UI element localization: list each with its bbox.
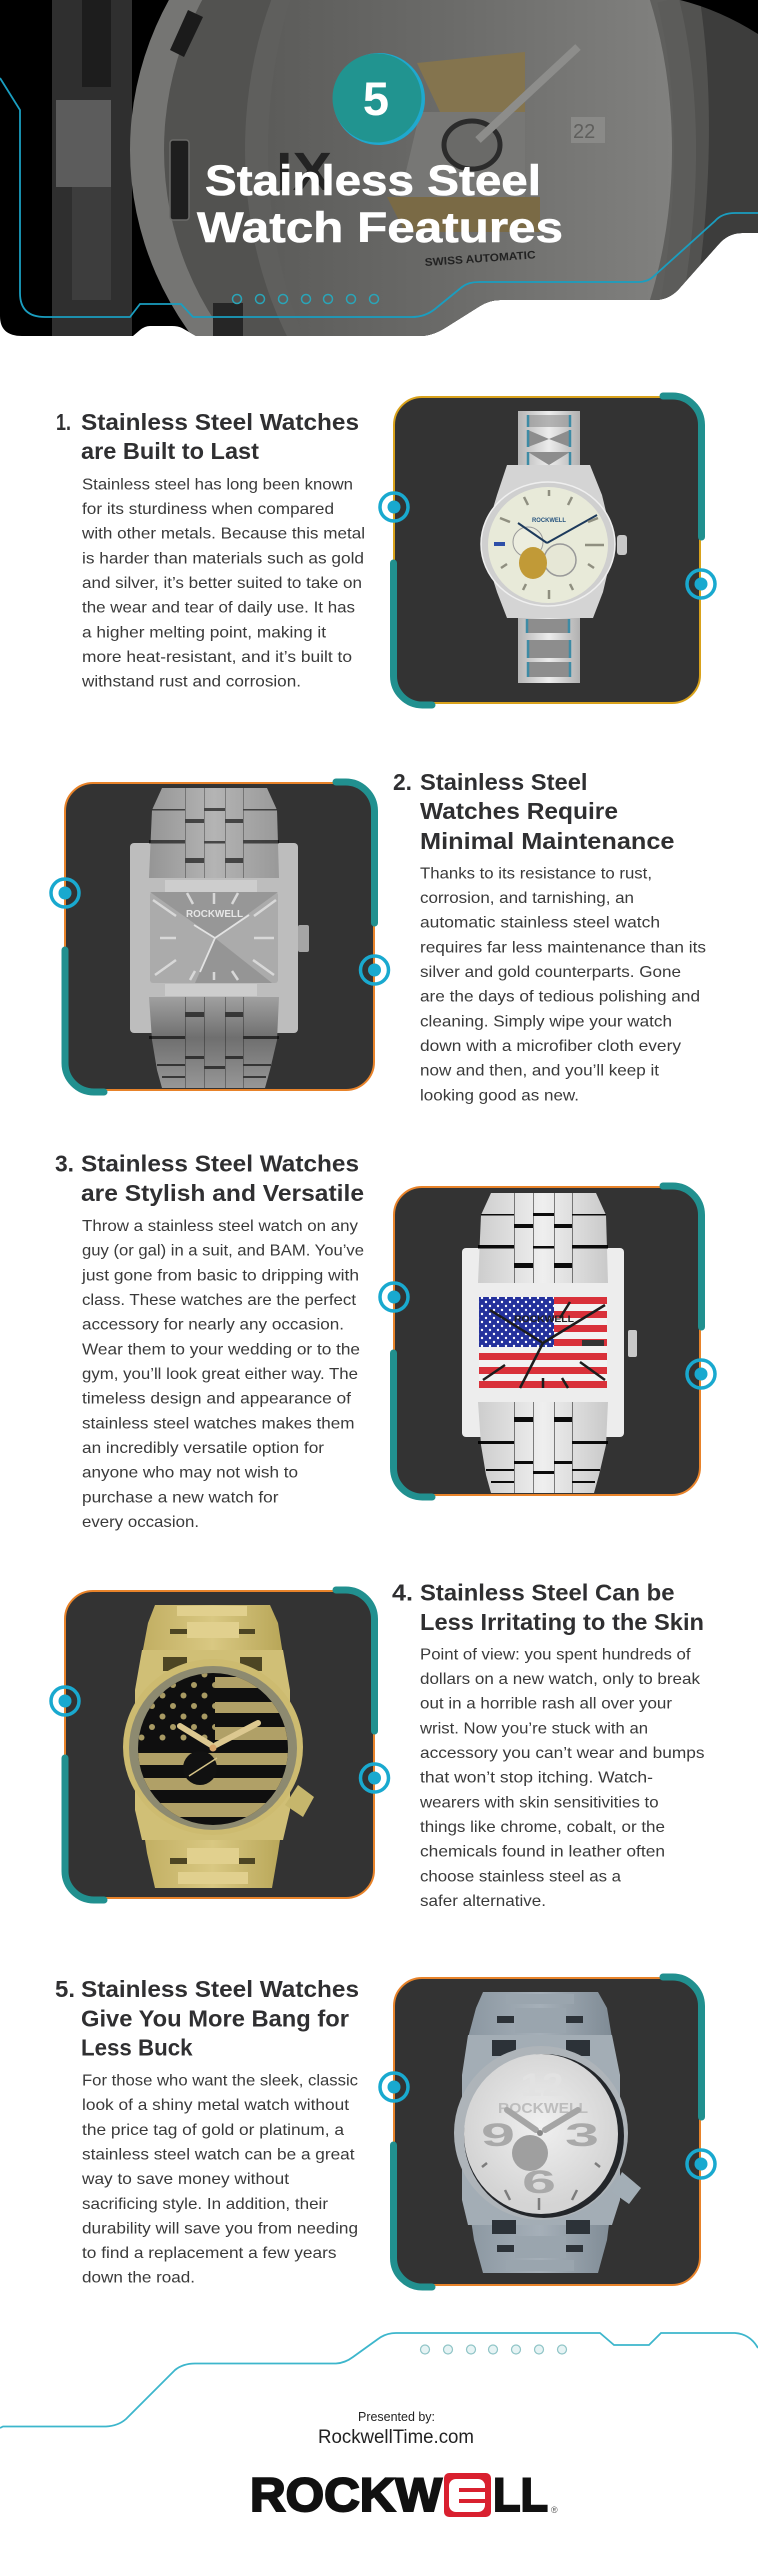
- body text 1: more heat-resistant, and it’s built to: [82, 649, 352, 666]
- icon: silver skeleton watch: ROCKWELL: [532, 518, 566, 524]
- body text 4: choose stainless steel as a: [420, 1868, 621, 1885]
- heading 4: 4.: [392, 1580, 413, 1606]
- logo: Rockwell: ROCKW: [250, 2468, 443, 2521]
- heading 2: Minimal Maintenance: [420, 828, 674, 854]
- body text 2: requires far less maintenance than its: [420, 939, 706, 956]
- body text 4: out in a horrible rash all over your: [420, 1696, 673, 1713]
- body text 2: [420, 865, 706, 1104]
- heading 5: Give You More Bang for: [81, 2006, 349, 2032]
- panel: watch 4: [51, 1590, 388, 1900]
- header background: watch close-up: [0, 0, 758, 336]
- body text 3: anyone who may not wish to: [82, 1465, 298, 1482]
- body text 3: gym, you’ll look great either way. The: [82, 1366, 358, 1383]
- icon: gold flag watch: [123, 1605, 314, 1888]
- heading 2: [393, 769, 674, 854]
- body text 5: stainless steel watch can be a great: [82, 2146, 355, 2164]
- body text 3: guy (or gal) in a suit, and BAM. You’ve: [82, 1243, 364, 1260]
- icon: steel-blue watch: 6: [522, 2164, 556, 2200]
- marker left: [380, 493, 408, 521]
- heading 3: are Stylish and Versatile: [81, 1180, 364, 1206]
- body text 2: silver and gold counterparts. Gone: [420, 964, 681, 981]
- icon: steel-blue watch: 12: [520, 2067, 564, 2103]
- icon: steel-blue watch: 3: [565, 2117, 599, 2153]
- header background: watch close-up: 22: [573, 121, 595, 143]
- body text 1: the wear and tear of daily use. It has: [82, 600, 355, 617]
- marker right: [360, 956, 388, 984]
- decorative dots row: [232, 294, 378, 304]
- body text 5: down the road.: [82, 2270, 195, 2287]
- heading 1: [56, 409, 359, 464]
- logo: Rockwell: LL: [493, 2468, 548, 2521]
- heading 1: are Built to Last: [81, 438, 259, 464]
- body text 3: accessory for nearly any occasion.: [82, 1317, 344, 1334]
- marker left: [380, 1283, 408, 1311]
- heading 5: [55, 1976, 359, 2061]
- body text 3: class. These watches are the perfect: [82, 1292, 357, 1309]
- body text 3: [81, 1218, 364, 1531]
- presented by: Presented by:: [358, 2410, 435, 2424]
- section 4: [51, 1580, 704, 1910]
- header banner: [0, 0, 758, 336]
- body text 1: with other metals. Because this metal: [81, 526, 365, 543]
- header background: watch close-up: IX: [276, 142, 332, 202]
- body text 1: a higher melting point, making it: [82, 624, 327, 641]
- icon: American flag watch: [462, 1193, 637, 1493]
- decorative dots row: [420, 2345, 566, 2354]
- body text 2: down with a microfiber cloth every: [420, 1038, 681, 1055]
- icon: American flag watch: ROCKWELL: [514, 1314, 575, 1324]
- body text 3: stainless steel watches makes them: [82, 1415, 354, 1432]
- icon: steel-blue watch: 9: [481, 2117, 515, 2153]
- logo: Rockwell: ®: [551, 2505, 558, 2515]
- footer: [0, 2333, 758, 2521]
- body text 3: purchase a new watch for: [82, 1489, 279, 1506]
- heading 5: 5.: [55, 1976, 75, 2002]
- heading 3: Stainless Steel Watches: [81, 1151, 359, 1177]
- heading 3: 3.: [55, 1151, 74, 1177]
- body text 2: automatic stainless steel watch: [420, 915, 660, 932]
- section 5: [55, 1976, 715, 2287]
- presented by: [318, 2410, 474, 2448]
- icon: silver rectangular watch: [130, 788, 309, 1088]
- body text 4: things like chrome, cobalt, or the: [420, 1819, 665, 1836]
- body text 2: Thanks to its resistance to rust,: [420, 865, 652, 882]
- marker left: [51, 1687, 79, 1715]
- header background: watch close-up: SWISS AUTOMATIC: [424, 249, 536, 269]
- number badge: 5: [363, 72, 389, 125]
- logo: Rockwell: [250, 2468, 558, 2521]
- body text 1: [81, 476, 365, 691]
- body text 2: corrosion, and tarnishing, an: [420, 890, 634, 907]
- body text 1: withstand rust and corrosion.: [81, 674, 301, 691]
- body text 3: just gone from basic to dripping with: [81, 1267, 359, 1284]
- heading 4: Less Irritating to the Skin: [420, 1609, 704, 1635]
- heading 2: Stainless Steel: [420, 769, 588, 795]
- heading 2: 2.: [393, 769, 412, 795]
- body text 4: [419, 1646, 704, 1910]
- panel: watch 5: [380, 1977, 715, 2287]
- body text 2: now and then, and you’ll keep it: [420, 1063, 660, 1080]
- body text 2: looking good as new.: [420, 1087, 579, 1104]
- title: Stainless Steel: [205, 157, 541, 205]
- body text 2: cleaning. Simply wipe your watch: [420, 1013, 672, 1030]
- body text 1: for its sturdiness when compared: [82, 501, 334, 518]
- icon: steel-blue watch: ROCKWELL: [498, 2100, 588, 2117]
- cyan circuit line: [0, 2333, 758, 2428]
- body text 3: every occasion.: [82, 1514, 199, 1531]
- body text 5: For those who want the sleek, classic: [82, 2072, 358, 2090]
- body text 4: wrist. Now you’re stuck with an: [419, 1720, 648, 1737]
- body text 5: the price tag of gold or platinum, a: [82, 2122, 344, 2139]
- heading 5: Less Buck: [81, 2035, 193, 2061]
- body text 5: look of a shiny metal watch without: [82, 2097, 350, 2114]
- body text 1: Stainless steel has long been known: [82, 476, 353, 493]
- marker right: [687, 2150, 715, 2178]
- body text 3: an incredibly versatile option for: [82, 1440, 325, 1457]
- body text 3: Wear them to your wedding or to the: [82, 1341, 360, 1358]
- heading 1: 1.: [56, 409, 71, 435]
- body text 4: that won’t stop itching. Watch-: [420, 1770, 653, 1787]
- section 3: [55, 1151, 715, 1531]
- body text 4: Point of view: you spent hundreds of: [420, 1646, 691, 1663]
- icon: silver skeleton watch: [481, 411, 627, 683]
- body text 1: is harder than materials such as gold: [82, 550, 364, 567]
- cyan circuit line: [0, 78, 758, 317]
- heading 3: [55, 1151, 364, 1206]
- number badge: [332, 53, 425, 145]
- heading 4: [392, 1580, 704, 1635]
- title: [197, 157, 563, 252]
- heading 1: Stainless Steel Watches: [81, 409, 359, 435]
- section 2: [51, 769, 706, 1104]
- body text 1: and silver, it’s better suited to take on: [82, 575, 362, 592]
- body text 2: are the days of tedious polishing and: [420, 989, 700, 1006]
- body text 4: chemicals found in leather often: [420, 1844, 665, 1861]
- panel: watch 2: [51, 782, 388, 1092]
- section 1: [56, 396, 715, 705]
- icon: silver rectangular watch: ROCKWELL: [186, 909, 243, 920]
- heading 4: Stainless Steel Can be: [420, 1580, 674, 1606]
- body text 4: safer alternative.: [420, 1893, 546, 1910]
- body text 5: durability will save you from needing: [82, 2220, 358, 2237]
- body text 5: [81, 2072, 358, 2287]
- marker left: [51, 879, 79, 907]
- marker left: [380, 2073, 408, 2101]
- body text 4: dollars on a new watch, only to break: [420, 1671, 701, 1688]
- panel: watch 3: [380, 1186, 715, 1497]
- panel: watch 1: [380, 396, 715, 705]
- heading 2: Watches Require: [420, 798, 618, 824]
- marker right: [687, 570, 715, 598]
- body text 4: accessory you can’t wear and bumps: [420, 1745, 704, 1762]
- body text 5: sacrificing style. In addition, their: [82, 2196, 329, 2213]
- heading 5: Stainless Steel Watches: [81, 1976, 359, 2002]
- body text 3: timeless design and appearance of: [82, 1391, 352, 1408]
- body text 4: wearers with skin sensitivities to: [419, 1794, 659, 1811]
- body text 3: Throw a stainless steel watch on any: [82, 1218, 358, 1235]
- title: Watch Features: [197, 204, 563, 252]
- body text 5: way to save money without: [81, 2171, 290, 2188]
- marker right: [687, 1360, 715, 1388]
- presented by: RockwellTime.com: [318, 2427, 474, 2448]
- icon: steel-blue watch: [454, 1992, 641, 2273]
- marker right: [360, 1764, 388, 1792]
- body text 5: to find a replacement a few years: [82, 2245, 336, 2262]
